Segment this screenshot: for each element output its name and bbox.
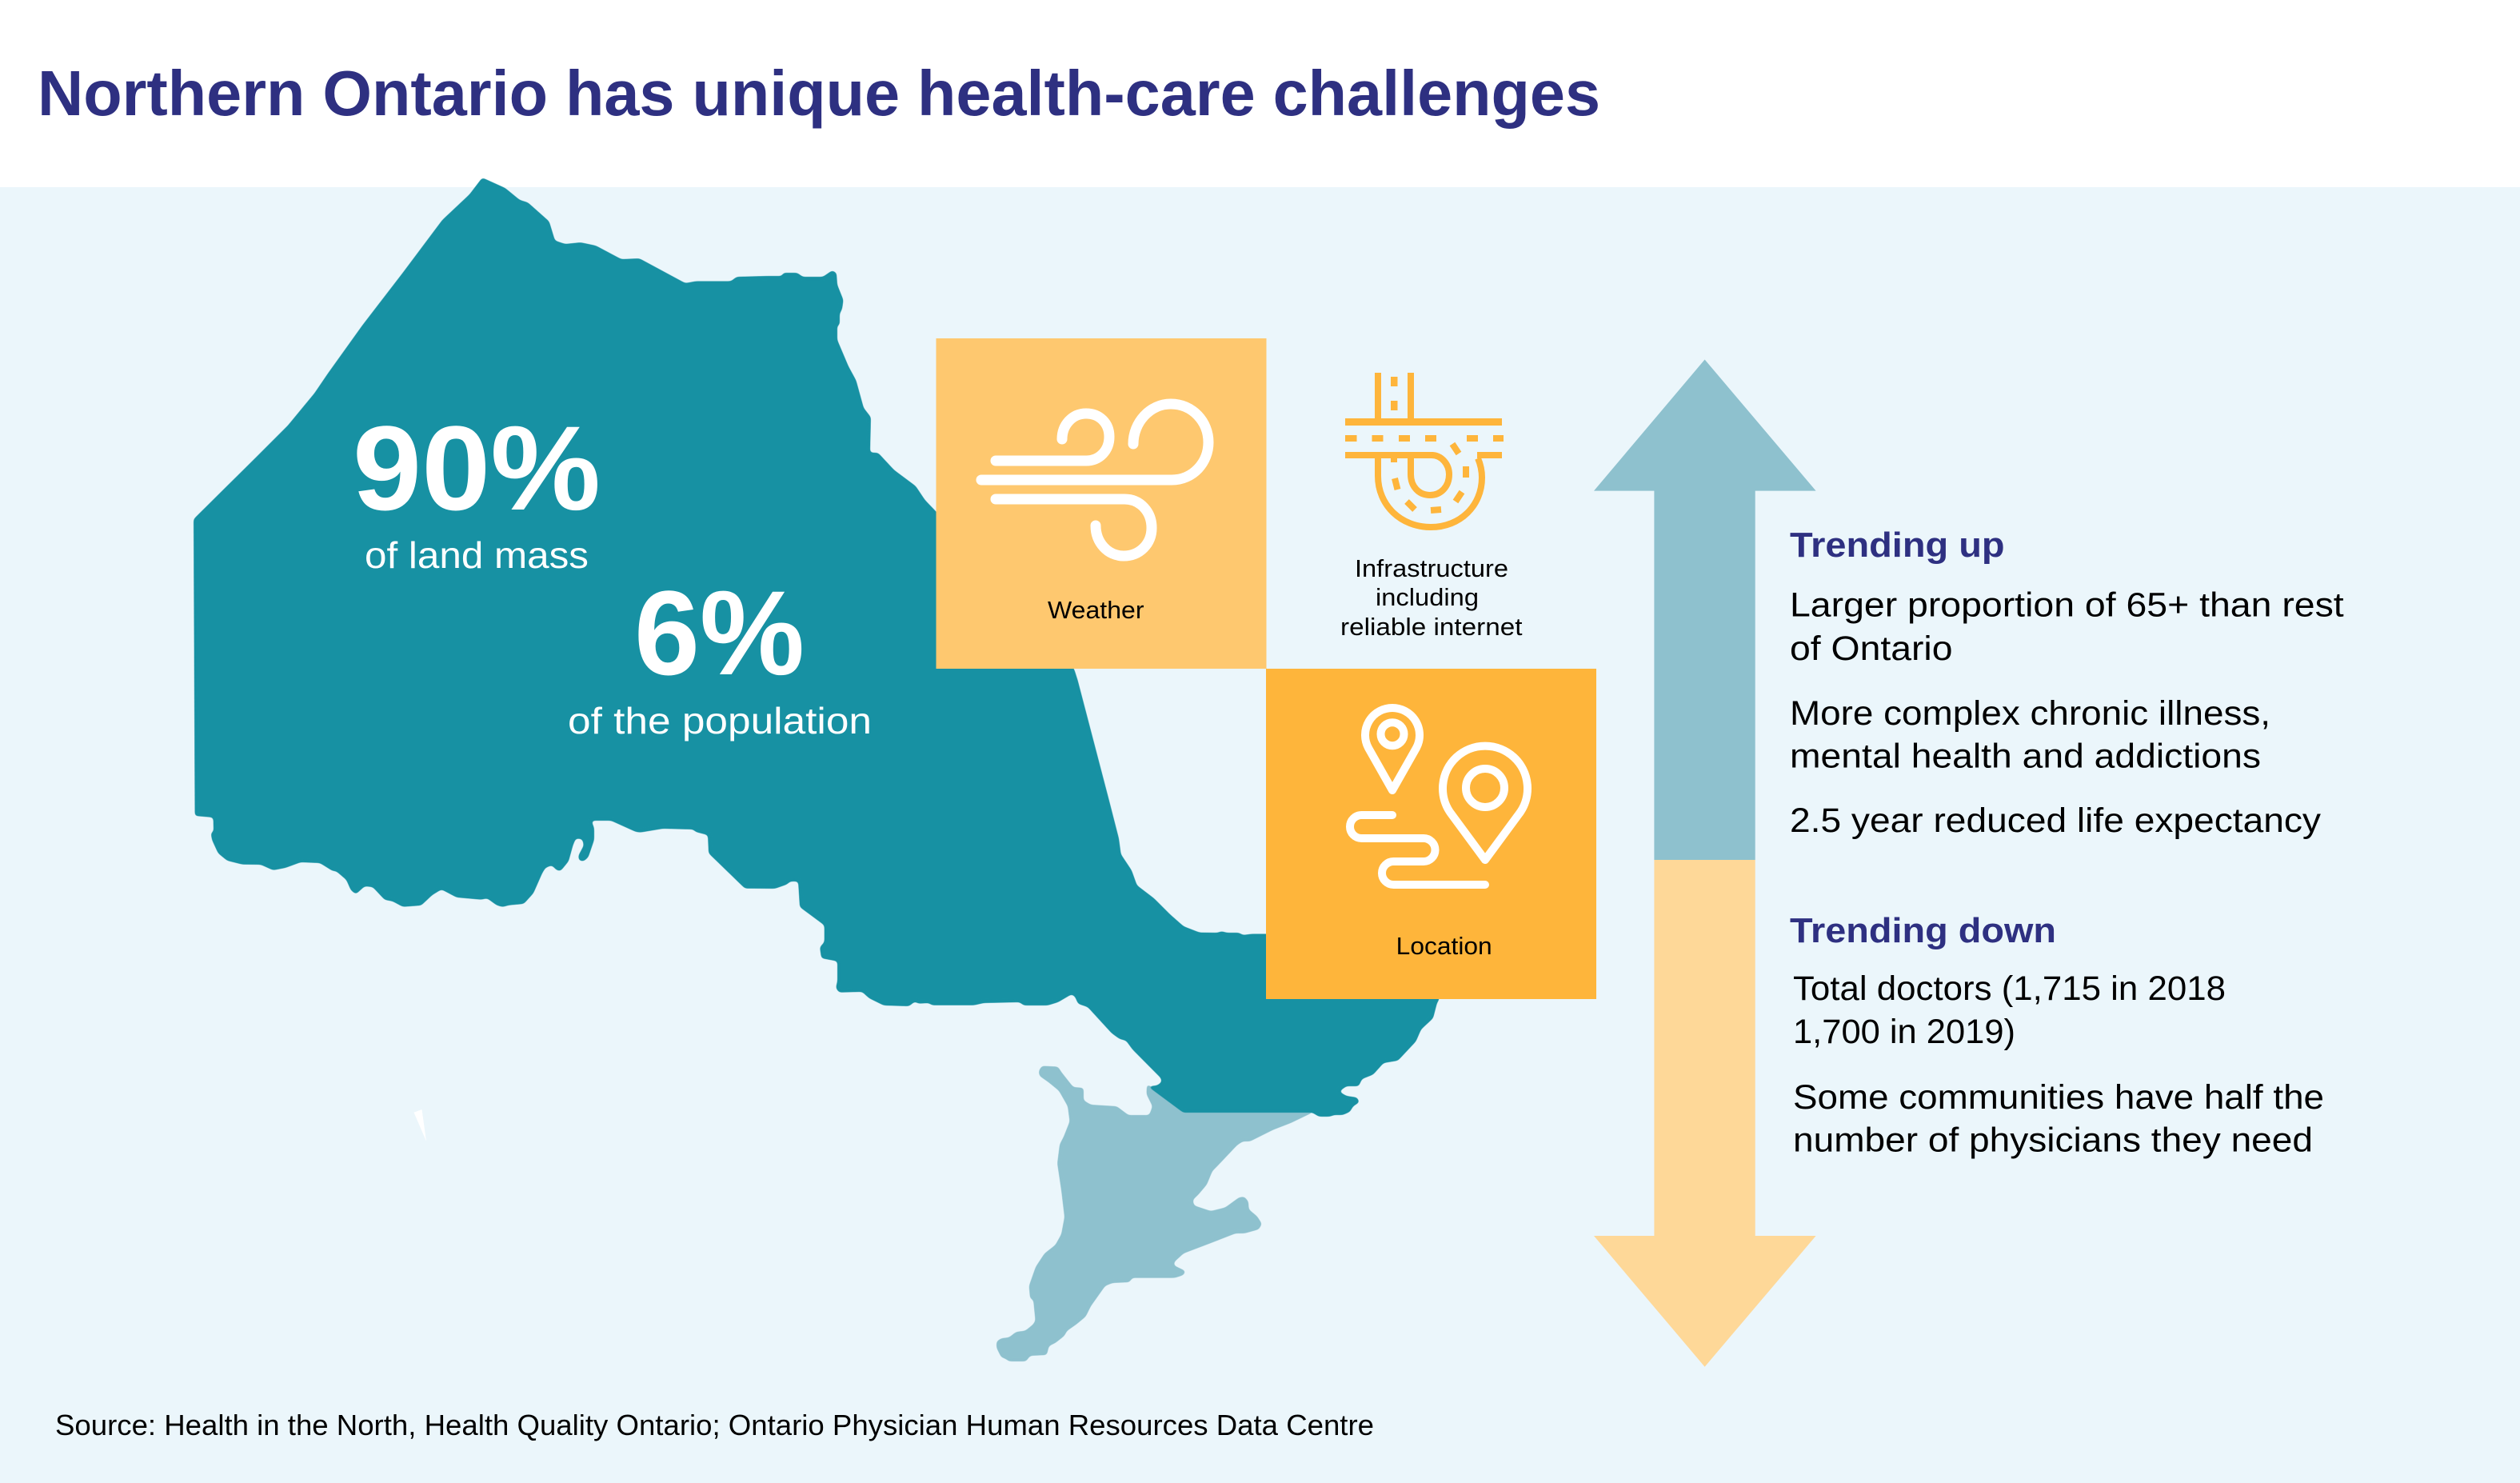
text block: trending down: Total doctors (1,715 in 2018 bbox=[1793, 969, 2226, 1008]
heading: trending down: Trending down bbox=[1790, 911, 2056, 950]
text block: trending down: 1,700 in 2019) bbox=[1793, 1013, 2015, 1051]
text block: trending up: mental health and addictions bbox=[1790, 738, 2261, 776]
page header background bbox=[0, 0, 2520, 187]
label: infrastructure: including bbox=[1376, 583, 1479, 611]
stat: 90% of land mass: of land mass bbox=[365, 534, 589, 576]
map: southern Ontario bbox=[996, 1065, 1312, 1361]
heading: trending up: Trending up bbox=[1790, 526, 2005, 565]
arrow: trending up bbox=[1594, 360, 1816, 860]
text block: trending up bbox=[1790, 526, 2344, 840]
text block: trending down: Some communities have half the bbox=[1793, 1078, 2324, 1117]
text block: trending up: More complex chronic illness, bbox=[1790, 694, 2270, 733]
panel: infrastructure bbox=[1340, 373, 1523, 641]
text block: trending up: Larger proportion of 65+ than rest bbox=[1790, 586, 2344, 624]
stat: 6% of the population: of the population bbox=[568, 700, 872, 742]
arrow: trending down bbox=[1594, 860, 1816, 1367]
stat: 6% of the population bbox=[568, 566, 872, 742]
text block: trending up: of Ontario bbox=[1790, 630, 1953, 668]
label: weather: Weather bbox=[1048, 596, 1144, 624]
text block: trending down bbox=[1790, 911, 2324, 1160]
icon: wind bbox=[981, 404, 1208, 556]
map: northern Ontario bbox=[194, 178, 1440, 1117]
title: Northern Ontario has unique health-care challenges bbox=[38, 58, 1600, 129]
label: infrastructure bbox=[1340, 554, 1523, 641]
text block: trending up: 2.5 year reduced life expectancy bbox=[1790, 801, 2322, 840]
icon: map pins and route bbox=[1350, 708, 1528, 885]
map: Ontario bbox=[194, 178, 1440, 1361]
source note: Source: Health in the North, Health Quality Ontario; Ontario Physician Human Resources Data Centre bbox=[55, 1409, 1374, 1441]
panel: location bbox=[1266, 669, 1596, 999]
stat: 90% of land mass: 90% bbox=[353, 401, 601, 535]
label: infrastructure: reliable internet bbox=[1340, 613, 1523, 641]
label: location: Location bbox=[1396, 932, 1492, 960]
icon: road interchange bbox=[1345, 373, 1504, 527]
map: white sliver bbox=[414, 1109, 426, 1141]
label: infrastructure: Infrastructure bbox=[1355, 554, 1508, 582]
stat: 6% of the population: 6% bbox=[634, 566, 805, 700]
text block: trending down: number of physicians they need bbox=[1793, 1121, 2313, 1160]
panel: weather bbox=[936, 338, 1267, 669]
